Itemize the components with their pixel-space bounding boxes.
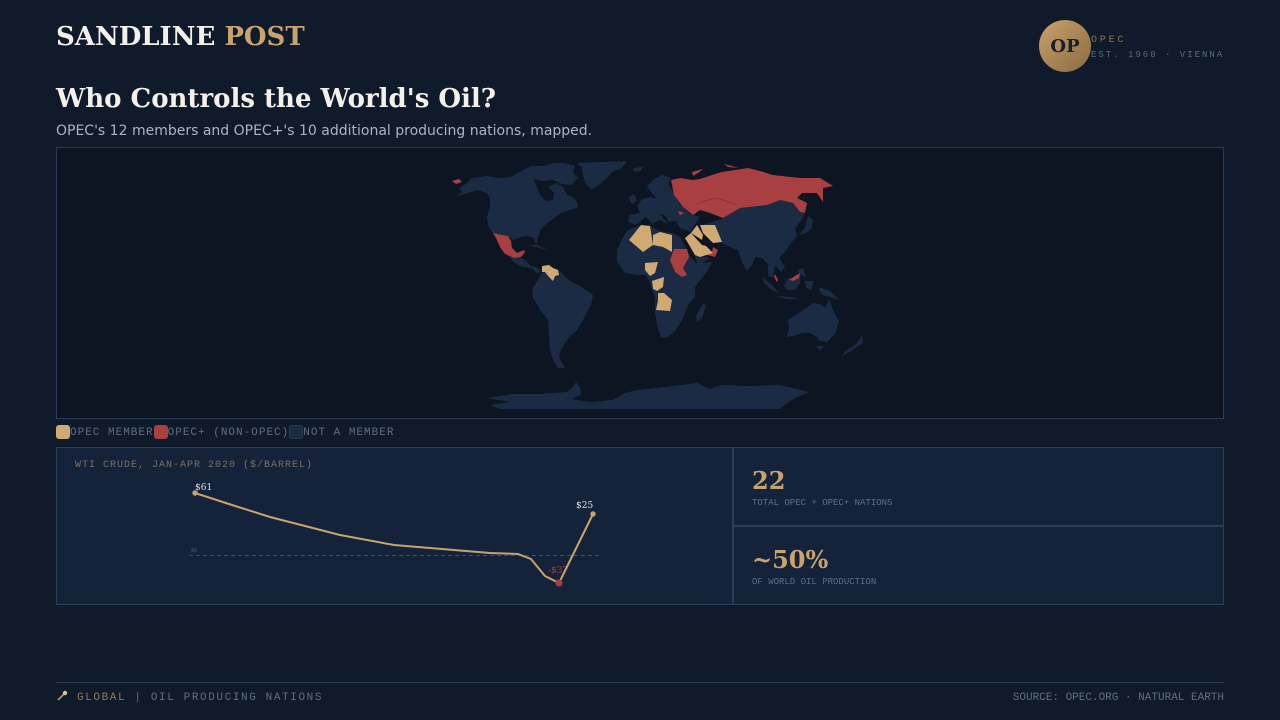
not-member countries	[455, 161, 863, 409]
OPEC member countries	[542, 225, 722, 311]
stat card: production	[733, 526, 1224, 605]
zero line	[189, 554, 600, 556]
stat label: OF WORLD OIL PRODUCTION	[752, 577, 876, 587]
OPEC+ non-OPEC countries	[452, 164, 833, 282]
icon: OP coin: OP	[1050, 36, 1080, 57]
legend: OPEC member: OPEC MEMBER	[70, 427, 154, 439]
panel: WTI crude chart	[56, 447, 733, 605]
publisher badge	[1039, 20, 1224, 72]
stat label: TOTAL OPEC + OPEC+ NATIONS	[752, 498, 892, 508]
legend	[56, 425, 394, 439]
low point	[556, 580, 562, 586]
end label: $25	[576, 501, 593, 511]
legend: not a member: NOT A MEMBER	[303, 427, 394, 439]
line chart	[189, 483, 599, 586]
badge detail: EST. 1960 · VIENNA	[1091, 50, 1224, 60]
icon: pin	[58, 690, 68, 700]
badge name: OPEC	[1091, 35, 1126, 46]
icon: OP coin	[1039, 20, 1091, 72]
zero label: $0	[191, 547, 197, 554]
legend: OPEC+ non-OPEC: OPEC+ (NON-OPEC)	[168, 427, 289, 439]
masthead: SANDLINE POST	[56, 22, 305, 52]
stat value: 22	[752, 466, 785, 495]
stat value: ~50%	[752, 545, 828, 574]
title: Who Controls the World's Oil?	[56, 84, 496, 114]
footer	[56, 682, 1224, 707]
footer location: GLOBAL | OIL PRODUCING NATIONS	[77, 692, 323, 704]
end point	[590, 511, 596, 517]
chart title: WTI CRUDE, JAN-APR 2020 ($/BARREL)	[75, 460, 313, 471]
footer source: SOURCE: OPEC.ORG · NATURAL EARTH	[1013, 692, 1224, 704]
price line	[195, 493, 593, 583]
start point	[192, 490, 198, 496]
stat card: nations	[733, 447, 1224, 526]
panel: world map	[56, 147, 1224, 419]
subtitle: OPEC's 12 members and OPEC+'s 10 additional producing nations, mapped.	[56, 123, 592, 139]
start label: $61	[195, 483, 212, 493]
low label: -$37	[548, 566, 568, 576]
